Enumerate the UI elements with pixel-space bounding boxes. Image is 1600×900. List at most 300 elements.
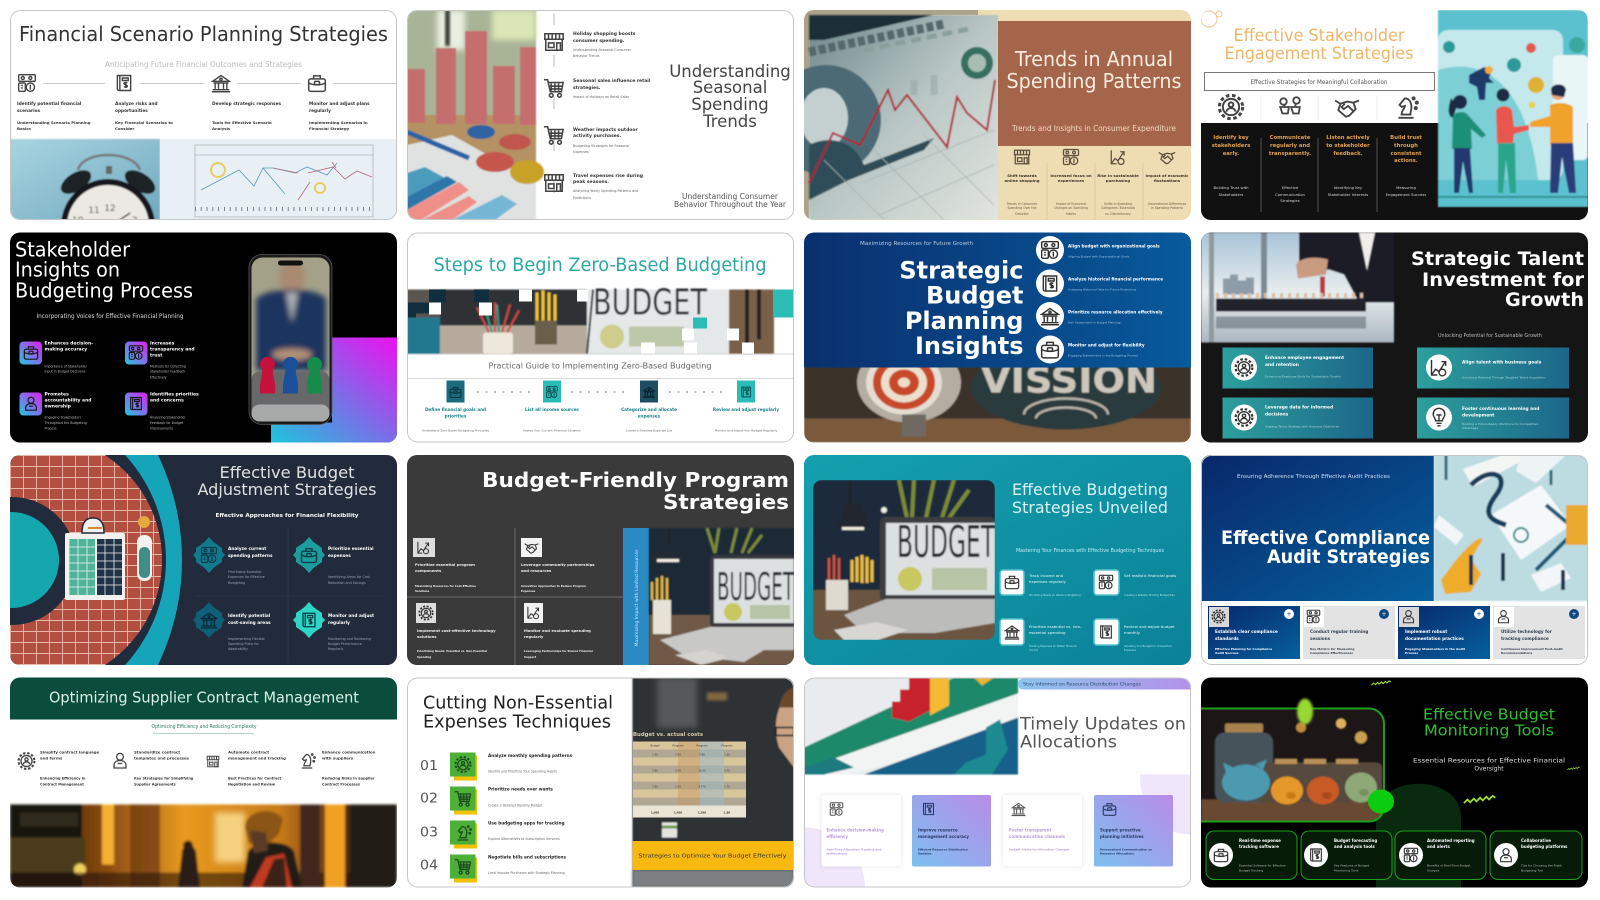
photo: piggy banks in jars [1201,708,1384,822]
subtitle box [1204,72,1434,90]
chart: budget vs actual table: 3,60 [652,768,658,772]
tool 4: Collaborative [1521,838,1551,843]
step 4: regularly [309,108,331,114]
item 1: Enhances decision- [44,340,93,346]
item 1: Prioritizing Needs vs. Wants in Budgeting [1029,593,1081,597]
item 4 [524,603,593,659]
chart: budget vs actual table: 1,600 [651,810,659,814]
tool 1: Essential Software for Effective [1239,864,1286,868]
item 1 [193,537,273,585]
title: Investment for [1422,269,1585,291]
step 2: List all income sources [525,407,579,412]
step 2: Consider [115,126,134,131]
title: Budget [926,282,1024,310]
card 3: + [1476,611,1482,618]
title: Budget-Friendly Program [482,468,789,492]
subtitle: Optimizing Efficiency and Reducing Complexity [152,724,257,730]
column 3 [1097,150,1139,216]
item 4: Identifies priorities [150,392,199,398]
item 1 [19,750,100,786]
panel: Budget-Friendly Program Strategies [407,455,794,665]
column 3: Identifying Key [1334,185,1363,190]
item 3: Negotiation and Review [228,782,276,786]
title: Expenses Techniques [423,712,611,732]
title: Insights [915,332,1024,360]
item 4: Feedback for Budget [150,421,184,425]
title: Timely Updates on [1019,714,1186,734]
panel: Financial Scenario Planning Strategies [10,10,397,220]
photo: alarm clock: 12 [104,204,116,214]
item 4: Regularly [328,647,344,651]
panel: Cutting Non-Essential Expenses Techniques [407,678,794,888]
step 1: priorities [445,414,467,418]
card 1 [1208,606,1300,659]
card 2: Updates [918,852,932,856]
title: Growth [1505,289,1584,311]
step 2: Analyze risks and [115,101,158,107]
item 4: Contract Processes [322,782,360,786]
card 4 [1493,606,1585,659]
step 3 [212,76,282,131]
chart: budget vs actual table: 7,80 [699,752,705,756]
item 3: Prioritize resource allocation effectively [1068,310,1163,314]
callout band [632,841,794,870]
column 2 [1050,150,1092,216]
step 1 [422,380,490,432]
step 3: Create a Detailed Expense List [626,428,673,432]
tool 3: Automated reporting [1427,838,1475,843]
tool 2 [1301,831,1392,880]
item 2: Methods for Collecting [150,364,186,368]
step 4: Review and adjust regularly [713,407,779,412]
item 3: Identify potential [228,613,271,619]
panel: Stakeholder Insights on Budgeting Process [10,232,397,442]
column 2: Effective [1282,185,1299,190]
item 2 [521,538,595,593]
card 2: Unlocking Potential Through Targeted Talent Acquisition [1462,376,1546,380]
item 2: Supplier Agreements [134,782,176,786]
item 2: Increases [150,340,175,346]
card 2: Conduct regular training [1310,629,1368,634]
title [1226,28,1413,62]
step 2: Key Financial Scenarios to [115,120,173,125]
item 3: Spending Plans for [228,642,259,646]
title [1006,47,1182,93]
subtitle: Mastering Your Finances with Effective Budgeting Techniques [1016,548,1165,554]
tool 4: budgeting platforms [1521,844,1568,849]
chart: budget vs actual table: 1,80 [724,810,730,814]
callout band: Strategies to Optimize Your Budget Effectively [638,854,787,860]
title: Allocations [1020,732,1117,752]
subtitle: Oversight [1474,766,1504,772]
subtitle: Anticipating Future Financial Outcomes and Strategies [105,60,302,69]
card 4: Building a Future-Ready Workforce for Competitive [1462,422,1538,426]
item 3: solutions [417,634,437,639]
item 4: Predictions [573,196,591,200]
chart: budget vs actual table: 7,50 [675,752,681,756]
column 2: Habits [1066,212,1076,216]
item 2: Standardize contract [134,750,180,754]
column 4: Generational Differences [1148,202,1187,206]
item 4: Analyzing Yearly Spending Patterns and [573,189,638,193]
column 3: to stakeholder [1326,143,1370,149]
tool 1: Budget Tracking [1239,868,1263,872]
item 1: expenses regularly [1029,579,1067,584]
chart: budget vs actual table: 2,30 [652,752,658,756]
title: Spending Patterns [1006,69,1182,93]
item 1 [413,538,476,593]
column 1: Stakeholders [1219,192,1243,197]
step 3 [621,380,677,432]
step 2 [115,76,173,131]
card 4: Foster continuous learning and [1462,406,1539,412]
icon: chess knight [1398,97,1418,118]
item 1: Importance of Stakeholder [44,364,88,368]
tool 3: Benefits of Real-Time Budget [1427,864,1471,868]
item 4: Monitor and evaluate spending [524,628,591,633]
item 2: expenses [328,554,351,559]
column 2: Communicate [1270,135,1311,141]
item 2: Impact of Holidays on Retail Sales [573,95,629,99]
card 4: tracking compliance [1501,636,1549,641]
vertical callout bar: Maximizing Impact with Limited Resources [634,550,639,646]
card 1 [1222,348,1373,388]
column 1: Decades [1015,212,1029,216]
step 4 [713,380,779,432]
item 1: consumer spending. [573,38,625,44]
title: Adjustment Strategies [198,480,376,499]
phone mockup [249,254,332,424]
item 2: Identifying Areas for Cost [328,575,371,579]
card 4: Recommendations [1501,651,1532,655]
item 3: ownership [44,404,72,410]
tool 2: Key Features of Budget [1334,864,1370,868]
subtitle: Effective Approaches for Financial Flexibility [216,513,359,519]
item 4: Review and adjust budget [1124,624,1175,629]
item 1 [545,31,636,58]
subtitle: Behavior Throughout the Year [674,200,787,209]
item 2 [293,537,374,585]
card 2: sessions [1310,636,1331,641]
photo: budget laptop: BUDGET [897,517,995,568]
chart: budget vs actual table: Budget [650,744,660,748]
banner [804,232,1191,368]
panel: Optimizing Supplier Contract Management [10,678,397,888]
item 4: Analyzing Stakeholder [150,416,186,420]
column 2: Strategies [1280,198,1300,203]
item 4: Support [524,655,537,659]
panel: Steps to Begin Zero-Based Budgeting [407,232,794,442]
subtitle: Practical Guide to Implementing Zero-Based Budgeting [488,362,712,370]
chart: budget vs actual table: 10,35 [698,768,706,772]
item 1: Track income and [1028,573,1064,578]
photo: budget laptop [813,480,995,640]
card 1 [822,795,901,866]
column 1: stakeholders [1212,143,1250,149]
item 2: Effectively [150,376,167,380]
chart: budget vs actual table: Program [697,744,708,748]
item 4 [293,602,374,651]
item 3 [1000,619,1082,652]
item 3: activity purchases. [573,133,621,139]
icon: plants [1280,97,1300,114]
card 3: Engaging Stakeholders in the Audit [1405,647,1466,651]
item 2 [544,78,651,99]
item 4: Monitor and adjust for flexibility [1068,342,1145,348]
item 2 [1036,270,1163,298]
card 3: Process [1405,651,1418,655]
illustration: compliance audit isometric [1434,455,1588,601]
item 1 [1036,236,1160,264]
item 1 [1000,570,1081,597]
item 3 [207,750,286,786]
title: Effective Compliance [1221,527,1430,549]
column 3: Shifts in Spending [1104,202,1132,206]
column 2: experiences [1058,178,1085,183]
card 2: Efficient Resource Distribution [918,848,968,852]
step 01: 01 [420,759,438,774]
step 1: Understand Zero-Based Budgeting Principles [422,428,490,432]
item 4 [1036,336,1145,364]
step 4 [309,76,370,131]
icon: gear [1219,95,1243,119]
tool 1 [1206,831,1297,880]
column 2: Increased focus on [1050,173,1092,178]
item 2: Leverage community partnerships [521,562,595,567]
item 3: Expenses [573,150,589,154]
column 3: vs. Discretionary [1105,212,1131,216]
column 4: Engagement Success [1386,192,1426,197]
step 02: Prioritize needs over wants [488,786,553,792]
column 1: Shift towards [1007,173,1037,178]
step 3: Analysis [212,126,231,131]
card 4 [1094,795,1173,866]
card 2: Key Metrics for Measuring [1310,647,1355,651]
chart: budget vs actual table: 3,50 [652,784,658,788]
subtitle [674,192,787,209]
column 2: regularly and [1270,143,1310,149]
title [1411,248,1585,311]
item 4: and concerns [150,398,184,404]
column 4 [1146,152,1189,210]
title: Seasonal [693,78,767,97]
step 03: Use budgeting apps for tracking [488,820,564,826]
card 1: Audit Success [1215,651,1239,655]
card 3 [1222,398,1373,438]
item 2: Stakeholder Feedback [150,370,185,374]
item 2: Expenses [521,589,536,593]
item 2: templates and processes [134,756,190,760]
subtitle: Maximizing Resources for Future Growth [860,241,973,247]
column 4: actions. [1394,158,1418,164]
item 2: Key Strategies for Simplifying [134,776,194,780]
decorative glow blob [1376,784,1461,888]
item 4: Engaging Stakeholders in the Budgeting Process [1068,354,1139,358]
photo: businessperson placing figures [1201,232,1394,342]
card 4: Advantage [1462,426,1478,430]
item 2: Analyze historical financial performance [1068,276,1163,282]
card 2 [1417,348,1569,388]
step 1: Identify potential financial [17,101,82,107]
card 3: Aligning Talent Strategy with Business Objectives [1265,424,1340,428]
panel: Trends in Annual Spending Patterns [771,10,1191,220]
illustration: test tube and coin [137,516,152,581]
card 1: standards [1215,636,1239,641]
item 1: Contract Management [40,782,84,786]
chart: budget vs actual table [633,732,746,818]
photo: budget desk: BUDGET [593,282,708,324]
item 3: Promotes [44,392,69,398]
icon: handshake [1335,100,1359,117]
decorative circles and brick backdrop [0,319,182,801]
column 4: Measuring [1396,185,1416,190]
item 3: Throughout the Budgeting [44,421,87,425]
step 04: Limit Impulse Purchases with Strategic Planning [488,871,565,875]
tool 4 [1490,831,1582,880]
card 1: Notifications [826,852,848,856]
text: BUDGET [717,565,794,609]
step 04: 04 [420,858,438,874]
illustration: people shaking hands [1438,10,1588,207]
chart: budget vs actual table: 3,70 [675,768,681,772]
column 3 [1326,135,1370,197]
column 2: transparently. [1269,151,1311,157]
item 4: Enhance communication [322,750,376,754]
step 3: Develop strategic responses [212,101,282,107]
item 4: Monitor and adjust [328,613,374,619]
step 4: Monitor and adjust plans [309,101,370,107]
item 1: Behavior Trends [573,54,600,58]
card 4: Personalized Communication on [1100,848,1152,852]
title: Planning [905,307,1024,335]
title [423,694,613,732]
decorative circles [1201,11,1222,27]
item 4 [545,173,643,200]
item 3: accountability and [44,398,92,404]
item 3: Prioritizing Needs: Essential vs. Non-Essential [417,649,487,653]
chart: budget vs actual table: 1,30 [724,752,730,756]
title: Spending [691,95,769,114]
column 4 [1386,135,1426,197]
column 1 [1004,150,1040,216]
item 4: Travel expenses rise during [573,173,643,179]
item 3: Control [1029,648,1038,652]
tool 3 [1395,831,1486,880]
card 2: + [1381,611,1387,618]
column 1: early. [1223,151,1239,157]
photo: alarm clock: 2 [132,216,138,226]
step 02 [420,786,553,814]
item 2 [114,750,194,786]
column 1: Spending Over the [1007,206,1037,210]
title [1019,714,1186,752]
column 4: Impact of economic [1146,173,1189,178]
tool 3: and alerts [1427,844,1450,849]
column 4: fluctuations [1154,178,1181,183]
column 2: Impact of Economic [1056,202,1087,206]
card 4: Continuous Improvement Post-Audit [1501,647,1563,651]
chart: budget vs actual table: Budget vs. actual costs [633,732,703,738]
item 2: trust [150,352,163,358]
subtitle: Essential Resources for Effective Financial [1413,758,1565,764]
item 1: spending patterns [228,553,273,559]
item 2: transparency and [150,346,195,352]
card 1: efficiency [826,834,848,839]
step 02: 02 [420,792,438,806]
title [1221,527,1430,568]
item 3: Tracking Expenses for Better Financial [1029,644,1077,648]
card 4: + [1571,611,1577,618]
item 4: peak seasons. [573,179,609,185]
card 4: planning initiatives [1100,834,1144,839]
item 1: Expenses for Effective [228,575,265,579]
item 3: Adaptability [228,647,248,651]
item 3: Engaging Stakeholders [44,416,82,420]
step 2: opportunities [115,108,148,114]
title [1423,706,1555,740]
title [899,256,1024,360]
title: Effective Budget [1423,706,1555,724]
step 02: Create a Detailed Monthly Budget [488,804,543,808]
photo: alarm clock [10,138,160,220]
title: Effective Budgeting [1012,480,1168,499]
photo: budget desk [407,282,774,354]
column 3: Rise in sustainable [1097,173,1139,178]
step 1 [17,75,91,131]
card 3: decisions [1265,412,1288,418]
tool 4: Tips for Choosing the Right [1520,864,1562,868]
card 1: Effective Planning for Compliance [1215,647,1272,651]
item 1: Analyze current [228,546,266,552]
item 4: regularly [524,634,544,639]
item 3: Implementing Flexible [228,637,265,641]
title: Steps to Begin Zero-Based Budgeting [434,255,766,276]
card 4: Resource Allocations [1100,852,1134,856]
title: Effective Stakeholder [1234,26,1405,46]
panel: Timely Updates on Allocations [804,678,1208,888]
step 01: Analyze monthly spending patterns [488,753,573,758]
item 3: Budgeting Strategies for Seasonal [573,144,629,148]
title [15,238,193,302]
step 3: expenses [638,414,661,418]
item 1: Prioritize essential program [415,562,475,567]
item 3 [1036,302,1163,330]
top pill [1018,678,1208,690]
card 3: communication channels [1009,834,1066,839]
item 4: monthly [1124,630,1141,635]
item 1: Budgeting [228,581,245,585]
card 3: Implement robust [1405,629,1447,634]
item 3: Risk Assessment in Budget Planning [1068,320,1121,324]
item 4 [125,392,199,430]
item 1: components [415,568,442,573]
title: Budgeting Process [15,278,193,302]
item 3: Best Practices for Contract [228,776,282,780]
title: Understanding [669,62,791,81]
title: Monitoring Tools [1424,722,1554,740]
item 4: Leveraging Partnerships for Shared Financial [524,649,593,653]
column 3: feedback. [1333,151,1363,157]
column 4: in Spending Patterns [1151,206,1183,210]
tool 2: Monitoring Tools [1334,868,1359,872]
title: Stakeholder [15,238,131,262]
panel: Effective Budgeting Strategies Unveiled [804,455,1191,665]
step 01 [420,752,573,780]
photo: isometric chart [804,678,1018,774]
title: Engagement Strategies [1224,44,1414,64]
item 3: essential spending [1029,630,1066,635]
gradient corner block [271,338,397,442]
